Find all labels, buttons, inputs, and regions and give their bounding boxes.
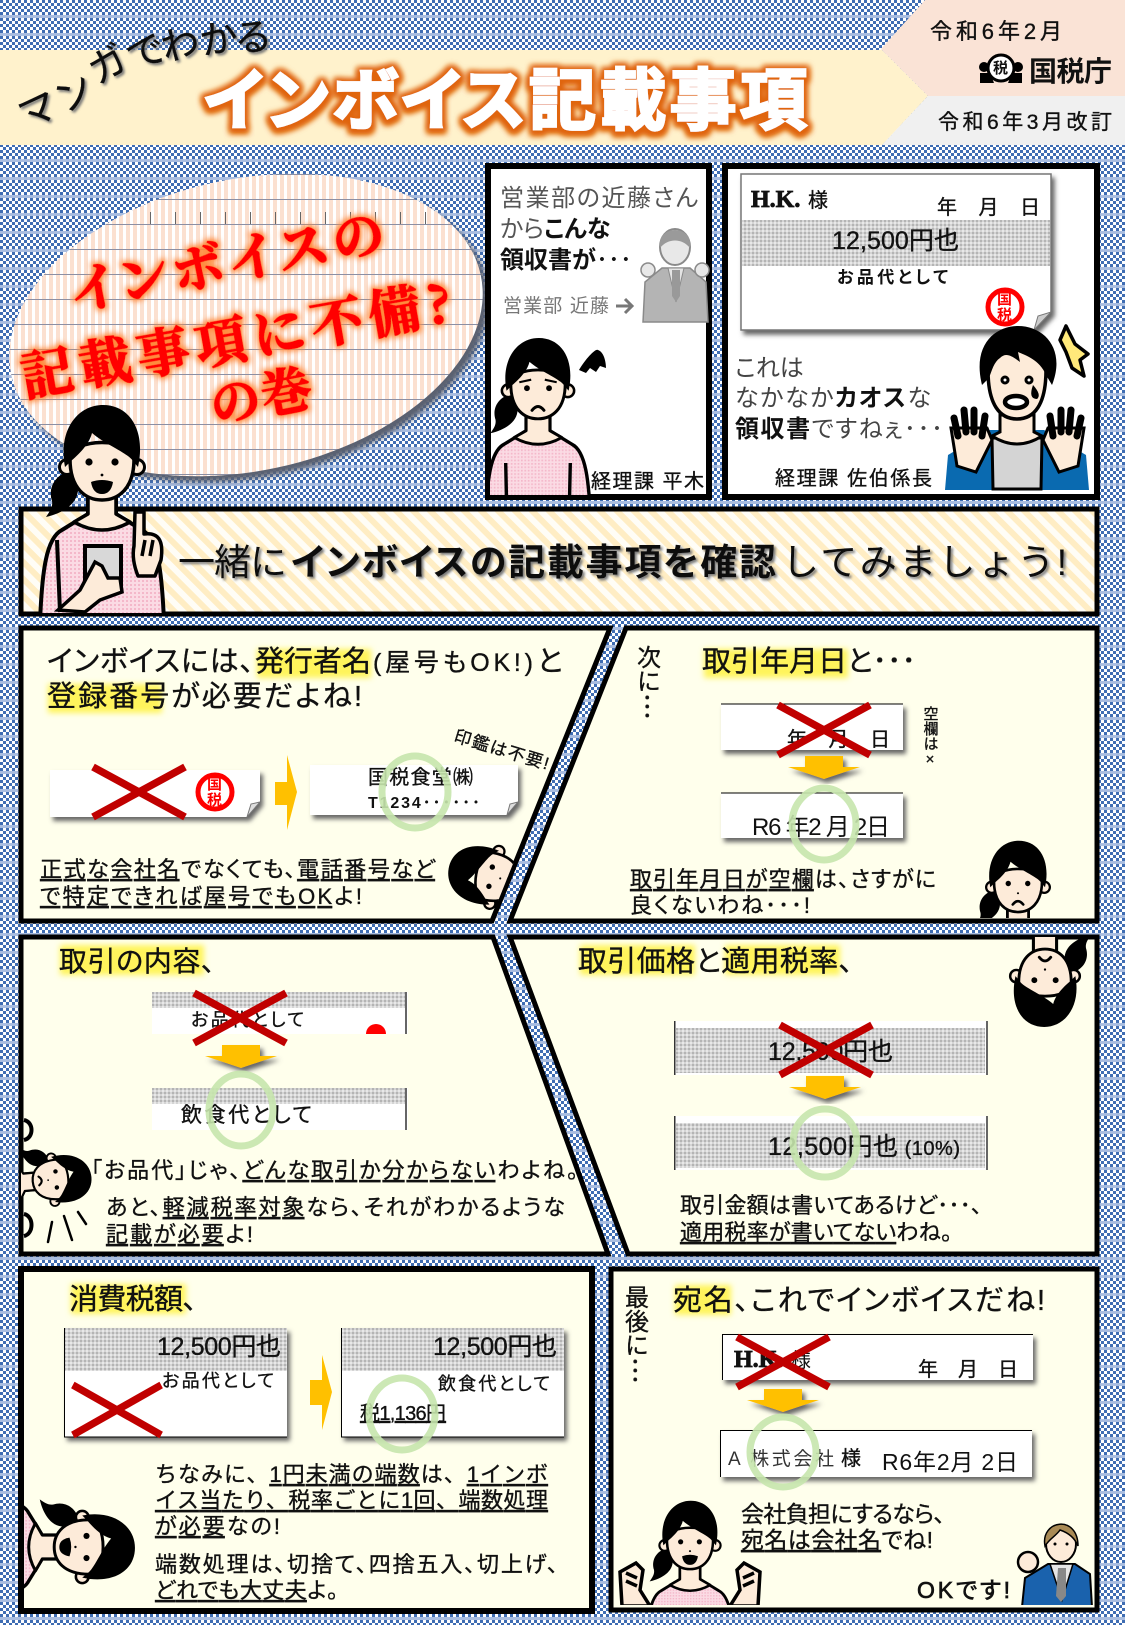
addressee after: R6年2月 2日 (882, 1449, 1018, 1475)
heading: 取引の内容、 (59, 946, 215, 977)
heading (47, 645, 563, 678)
character: worried accountant (490, 338, 591, 495)
content before (152, 992, 408, 1043)
receipt after: 税1,136円 (360, 1402, 446, 1425)
icon: red cross (780, 1025, 872, 1075)
character: Kondo label: 営業部 近藤 (503, 295, 609, 317)
arrow: to Kondo (616, 299, 632, 313)
receipt before (64, 1328, 287, 1437)
price after: 12,500円也 (10%) (768, 1133, 960, 1161)
invoice before (50, 767, 260, 817)
header band (0, 0, 1125, 145)
icon: red cross (93, 767, 185, 817)
receipt: 12,500円也 (832, 227, 959, 255)
character: salesman in blue suit (1018, 1524, 1092, 1607)
oval title text: 記載事項に不備? (15, 261, 457, 411)
heading: 発行者名 (255, 645, 371, 678)
arrow (789, 1076, 861, 1099)
vertical label: 最後に ･･･ (620, 1285, 648, 1384)
oval title text (15, 191, 457, 439)
character: upside-down accountant (1008, 937, 1088, 1027)
oval title text: の巻 (203, 349, 317, 439)
content after: 飲食代として (181, 1104, 312, 1127)
date before: 年 月 日 (787, 728, 890, 751)
receipt (741, 174, 1051, 330)
character: guide with smartphone (40, 405, 164, 622)
panel: accounting chief Saeki (725, 166, 1097, 497)
speech text: これは (735, 355, 804, 382)
addressee before (722, 1334, 1033, 1387)
main title: インボイス記載事項 (204, 64, 807, 139)
price before: 12,500円也 (768, 1038, 893, 1066)
heading: 取引価格と適用税率、 (578, 945, 853, 978)
icon: red seal (988, 290, 1022, 324)
receipt before: お品代として (162, 1371, 274, 1391)
icon: red cross (194, 993, 286, 1043)
icon: surprise spark (1060, 326, 1088, 376)
body text 2: 良くないわね･･･! (630, 893, 810, 918)
panel: issuer name and number (21, 628, 617, 943)
body text 5: どれでも大丈夫よ。 (155, 1578, 338, 1603)
heading: (屋号もOK!) (373, 649, 533, 677)
highlight: date (704, 649, 848, 678)
character: frowning accountant (980, 840, 1051, 918)
arrow (788, 756, 860, 779)
character: grey salesman (641, 229, 709, 322)
icon: red seal: 税 (207, 792, 222, 809)
note: blank not allowed: 空欄は× (922, 706, 938, 768)
icon: red seal: 税 (997, 307, 1012, 324)
receipt before: 12,500円也 (157, 1333, 281, 1361)
panel frame (510, 628, 1097, 921)
speech text 3: 領収書ですねぇ･･･ (735, 416, 943, 443)
panel frame (21, 937, 608, 1254)
heading: 取引年月日と･･･ (702, 645, 916, 678)
banner text: インボイスの記載事項を確認 (291, 542, 776, 583)
icon: red seal (198, 775, 232, 809)
body text: 取引金額は書いてあるけど･･･、 (680, 1193, 982, 1218)
band: cream ribbon (0, 50, 928, 145)
icon: tax agency logo: 税 (993, 60, 1008, 77)
body text 2: あと、軽減税率対象なら、それがわかるような (106, 1195, 565, 1220)
icon: red cross (737, 1337, 829, 1387)
body text 2: で特定できれば屋号でもOKよ! (40, 884, 362, 909)
price after (674, 1109, 988, 1177)
body text: 正式な会社名でなくても、電話番号など (40, 857, 436, 882)
heading: 宛名、これでインボイスだね! (673, 1284, 1045, 1317)
heading: インボイスには、 (47, 646, 254, 678)
panel frame (510, 937, 1097, 1254)
banner text: してみましょう! (782, 542, 1067, 583)
addressee before: 年 月 日 (918, 1358, 1018, 1381)
invoice after (310, 756, 518, 828)
heading: 消費税額、 (69, 1283, 197, 1316)
banner text (178, 542, 1067, 583)
panel: banner (21, 509, 1097, 614)
icon: red cross (778, 705, 870, 755)
invoice after: 国税食堂㈱ (368, 766, 473, 789)
arrow (205, 1045, 277, 1068)
narration text: 営業部の近藤さん (500, 185, 698, 212)
invoice after: T1234･･････ (368, 795, 480, 812)
icon: red cross (73, 1385, 161, 1435)
banner text: 一緒に (178, 542, 286, 583)
date after (721, 788, 903, 860)
body text: 取引年月日が空欄は、さすがに (630, 867, 936, 892)
receipt: お品代として (837, 268, 948, 287)
name label: 経理課 平木 (591, 470, 704, 493)
subtitle: manga: マンガでわかる (14, 16, 272, 137)
receipt: 年 月 日 (937, 196, 1040, 219)
banner frame (21, 509, 1097, 614)
receipt: H.K. (751, 187, 800, 213)
body text 4: 端数処理は、切捨て、四捨五入、切上げ、 (155, 1552, 558, 1577)
panel: price and tax rate (506, 934, 1100, 1256)
content before: お品代として (191, 1010, 304, 1030)
date after: R6 年2 月 2日 (752, 814, 890, 841)
heading: と (537, 646, 563, 678)
panel: transaction content (0, 937, 608, 1254)
panel: addressee (611, 1269, 1097, 1625)
body text 2: 宛名は会社名でね! (741, 1527, 933, 1553)
body text 2: イス当たり、税率ごとに1回、端数処理 (155, 1488, 548, 1513)
speech text 2: なかなかカオスな (735, 385, 931, 412)
arrow (747, 1389, 819, 1412)
character: peeking accountant (448, 844, 514, 910)
price before (674, 1021, 988, 1075)
highlight: addressee (675, 1285, 731, 1315)
ok speech: OKです! (917, 1577, 1010, 1603)
panel frame (611, 1269, 1097, 1610)
panel: transaction date (506, 626, 1100, 924)
oval title bubble (9, 174, 485, 487)
narration text 2: からこんな (500, 216, 610, 243)
body text: 会社負担にするなら、 (741, 1501, 945, 1527)
name label: 経理課 佐伯係長 (775, 467, 932, 490)
receipt: 様 (808, 189, 828, 212)
receipt after: 12,500円也 (433, 1333, 557, 1361)
highlight: price (580, 945, 840, 975)
receipt after (341, 1328, 564, 1450)
narration text 3: 領収書が･･･ (500, 246, 632, 274)
vertical label: 次に ･･･ (632, 645, 660, 720)
note: seal not required: 印鑑は不要! (452, 727, 551, 773)
body text 2: 適用税率が書いてないわね。 (680, 1220, 952, 1245)
character: cheering accountant (618, 1500, 762, 1605)
panel frame (725, 166, 1097, 497)
date before (721, 704, 903, 755)
panel frame (21, 628, 610, 921)
band: date tab (881, 0, 1125, 96)
agency name: 国税庁 (1029, 56, 1112, 87)
content after (152, 1074, 408, 1146)
revision date: 令和6年3月改訂 (938, 111, 1112, 134)
band: revision tab (882, 96, 1125, 145)
addressee after: 様 (841, 1447, 861, 1470)
addressee before: 様 (791, 1349, 811, 1372)
character: sideways accountant (21, 1118, 92, 1244)
icon: gloom scribble (579, 350, 606, 373)
icon: red seal: 国 (207, 776, 222, 793)
panel: accounting Hiraki (485, 166, 709, 522)
highlight: tax (71, 1284, 186, 1314)
highlight: content (60, 945, 204, 975)
oval sheet (0, 170, 490, 480)
panel frame (21, 1269, 592, 1611)
body text: ちなみに、1円未満の端数は、1インボ (155, 1462, 548, 1487)
icon: tax agency logo (979, 55, 1023, 83)
receipt after: 飲食代として (438, 1374, 550, 1394)
body text: 「お品代」じゃ、どんな取引か分からないわよね。 (91, 1158, 578, 1183)
addressee before: H.K. (734, 1347, 783, 1373)
oval shadow (0, 138, 517, 524)
character: surprised chief (945, 326, 1089, 490)
addressee after (720, 1417, 1032, 1487)
character: sideways accountant (24, 1499, 135, 1589)
date: 令和6年2月 (930, 19, 1062, 44)
body text 3: が必要なの! (155, 1514, 280, 1539)
arrow (310, 1355, 332, 1430)
panel frame (488, 166, 709, 497)
heading line 2: 登録番号が必要だよね! (47, 680, 362, 713)
body text 3: 記載が必要よ! (106, 1222, 253, 1247)
highlight: issuer (48, 649, 371, 713)
arrow (275, 755, 297, 830)
addressee after: A 株式会社 (728, 1448, 834, 1470)
oval title text: インボイスの (64, 191, 390, 326)
panel: consumption tax (0, 1269, 592, 1611)
icon: red seal: 国 (997, 291, 1012, 308)
